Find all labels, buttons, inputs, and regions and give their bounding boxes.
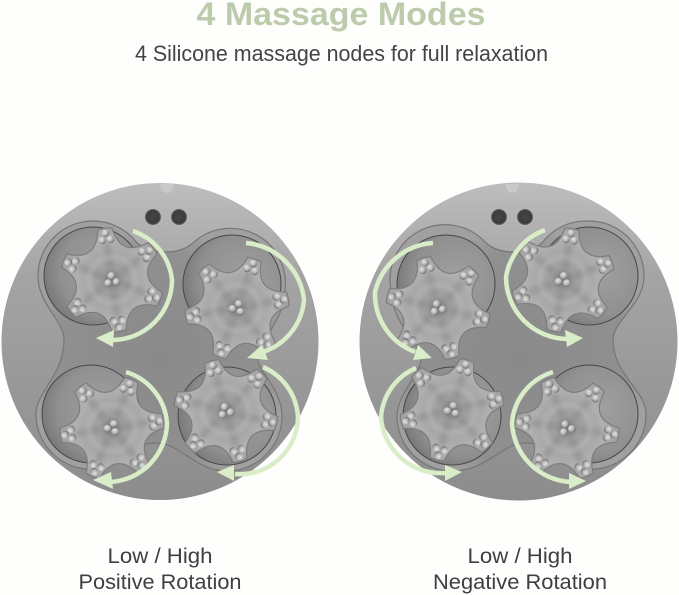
arrow: top right clockwise — [246, 243, 304, 360]
arrow: top right counterclockwise — [506, 230, 583, 347]
arrow: top left counterclockwise — [375, 243, 433, 360]
arrow: top left clockwise — [96, 231, 172, 347]
device body — [2, 183, 318, 500]
label: positive rotation: Positive Rotation — [78, 571, 242, 594]
label: negative rotation — [433, 545, 607, 594]
massage node top left — [377, 235, 499, 372]
indicator nub — [160, 184, 174, 193]
label: positive rotation: Low / High — [108, 545, 212, 568]
arrow: bottom right clockwise — [217, 367, 298, 481]
arrow: bottom left clockwise — [93, 372, 167, 489]
massage node bottom right — [503, 361, 638, 495]
label: positive rotation — [78, 545, 242, 594]
massage node top right — [174, 235, 300, 374]
control buttons — [145, 209, 187, 225]
control buttons — [491, 209, 533, 225]
label: negative rotation: Negative Rotation — [433, 571, 607, 594]
massage node top right — [506, 220, 638, 340]
device body — [360, 182, 678, 500]
massage node bottom left — [391, 346, 513, 474]
label: negative rotation: Low / High — [468, 545, 572, 568]
arrow: bottom right counterclockwise — [512, 372, 586, 489]
arrow: bottom left counterclockwise — [381, 368, 462, 481]
panel: positive rotation device — [2, 183, 318, 500]
subtitle: 4 Silicone massage nodes for full relaxation — [135, 41, 548, 66]
indicator nub — [505, 184, 519, 193]
massage node top left — [44, 222, 167, 338]
panel: negative rotation device — [360, 182, 678, 500]
massage node bottom left — [42, 361, 176, 495]
clover plate — [36, 221, 285, 471]
massage node bottom right — [165, 347, 287, 475]
clover plate — [390, 221, 646, 471]
